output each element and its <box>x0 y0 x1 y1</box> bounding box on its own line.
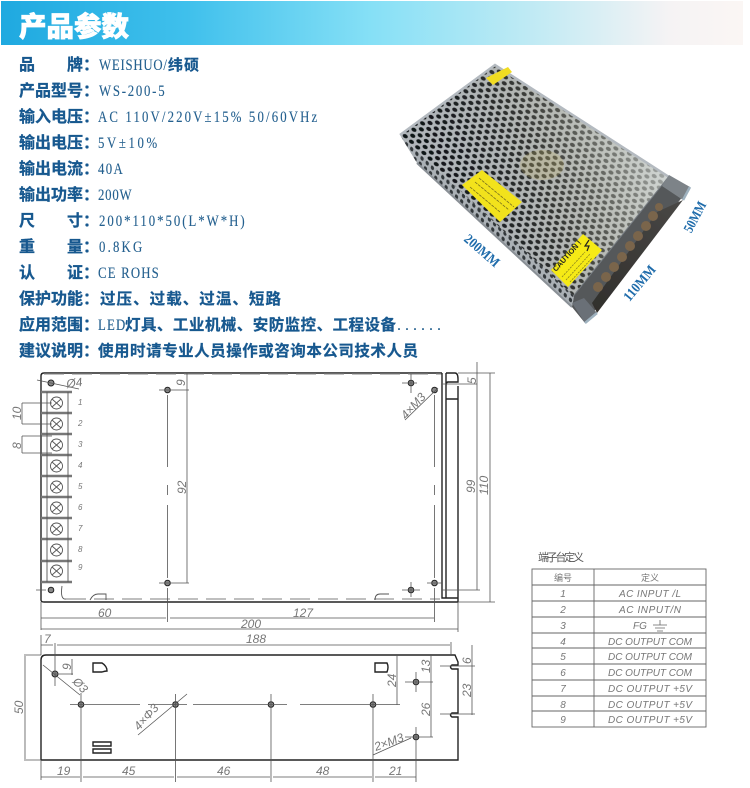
spec: brand: WEISHUO/ <box>99 57 168 74</box>
dimension values: 7 <box>44 632 52 646</box>
dimension values: 26 <box>419 702 433 717</box>
spec: weight: 量： <box>67 238 99 256</box>
spec: output voltage <box>19 133 157 152</box>
yellow caution label: CAUTION ! <box>551 239 583 273</box>
table text: DC OUTPUT +5V <box>608 684 693 695</box>
terminal screws <box>593 203 663 292</box>
dimension values: 24 <box>385 673 399 688</box>
dimension values <box>12 632 474 778</box>
table text: 2 <box>559 605 566 616</box>
table text: 编号 <box>554 572 572 583</box>
spec: input voltage: AC 110V/220V±15% 50/60VHz <box>98 109 318 126</box>
spec: application <box>19 315 441 334</box>
table text: DC OUTPUT COM <box>608 637 693 648</box>
holes <box>52 671 419 740</box>
spec: certification <box>19 264 159 282</box>
table text: 6 <box>560 668 566 679</box>
dimension values: 4×Φ3 <box>131 701 162 733</box>
spec: protection: 过压、过载、过温、短路 <box>100 289 281 308</box>
dimension values: 60 <box>98 606 112 620</box>
table text: 1 <box>560 589 566 600</box>
table text: 3 <box>560 621 566 632</box>
dimension values: 10 <box>10 406 24 420</box>
spec: application: LED <box>98 317 125 334</box>
terminal numbers: 4 <box>78 461 83 470</box>
spec: protection <box>19 289 281 308</box>
spec: input voltage <box>19 107 318 126</box>
table text: AC INPUT/N <box>618 605 682 616</box>
spec: advice: 使用时请专业人员操作或咨询本公司技术人员 <box>98 341 418 360</box>
title: 产品参数 <box>19 11 129 42</box>
spec: output current: 输出电流： <box>19 159 99 178</box>
terminal definition table <box>532 550 706 727</box>
table text: 5 <box>560 652 566 663</box>
terminal block <box>41 392 83 582</box>
top perforated face <box>400 65 669 296</box>
spec: application: 灯具、工业机械、安防监控、工程设备 <box>125 315 396 334</box>
dimension values: 21 <box>388 764 402 778</box>
front view drawing <box>12 632 475 782</box>
top view drawing <box>10 362 495 632</box>
chassis outline <box>41 373 458 602</box>
dimension: 200MM: 200MM <box>461 232 502 271</box>
spec: size: 尺 <box>19 213 35 230</box>
dimension values: 50 <box>12 700 26 714</box>
table text: DC OUTPUT +5V <box>608 715 693 726</box>
dimension values: 188 <box>246 632 266 646</box>
spec: size: 200*110*50(L*W*H) <box>99 213 245 230</box>
photo dimension labels <box>461 199 710 305</box>
centre lines and dimensions <box>24 635 475 782</box>
terminal face <box>572 177 690 323</box>
latch details <box>62 586 389 600</box>
dimension values: 2×M3 <box>371 730 406 754</box>
dimension values <box>10 375 491 631</box>
dimension values: 200 <box>240 617 261 631</box>
table text: AC INPUT /L <box>618 589 681 600</box>
spec: certification: CE ROHS <box>98 265 159 282</box>
table title: 端子台定义 <box>538 550 584 564</box>
yellow label: middle <box>462 170 522 222</box>
spec: size <box>19 211 245 230</box>
dimension values: 9 <box>174 379 188 386</box>
dimension values: 45 <box>122 764 136 778</box>
panel outline <box>41 655 458 760</box>
spec: output power: 200W <box>98 187 132 204</box>
spec: input voltage: 输入电压： <box>19 107 99 126</box>
terminal numbers <box>77 398 83 572</box>
dimension values: 5 <box>465 377 479 384</box>
dimension values: 46 <box>217 764 231 778</box>
terminal numbers: 2 <box>77 419 83 428</box>
table text: FG <box>633 621 647 632</box>
spec: weight <box>19 238 142 256</box>
slots <box>93 663 388 672</box>
spec: certification: 证： <box>67 264 99 282</box>
dimension: 110MM: 110MM <box>621 263 660 305</box>
dimension values: Ø4 <box>64 375 84 391</box>
spec: application: 应用范围： <box>19 315 99 334</box>
dimension values: 13 <box>419 659 433 673</box>
spec: output current: 40A <box>98 161 123 178</box>
icon: ground symbol <box>653 620 667 631</box>
spec: model <box>19 82 165 100</box>
table text: 定义 <box>641 572 659 583</box>
spec: output current <box>19 159 123 178</box>
table text: 9 <box>560 715 566 726</box>
centre lines and dimensions <box>22 362 495 632</box>
spec: brand: 牌： <box>67 55 99 74</box>
terminal numbers: 5 <box>78 482 83 491</box>
terminal numbers: 8 <box>78 545 83 554</box>
dimension values: Ø3 <box>69 674 91 696</box>
spec: weight: 0.8KG <box>99 239 142 256</box>
side face <box>400 135 574 307</box>
terminal numbers: 1 <box>78 398 82 407</box>
spec: advice: 建议说明： <box>19 342 99 360</box>
spec list <box>19 55 441 360</box>
dimension values: 99 <box>464 479 478 493</box>
spec: brand: 品 <box>19 57 35 74</box>
spec: output power: 输出功率： <box>19 185 99 204</box>
yellow label: top <box>486 67 512 85</box>
yellow caution label <box>551 234 602 287</box>
table text: 8 <box>560 700 566 711</box>
spec: brand: 纬硕 <box>168 56 199 74</box>
table text: 4 <box>560 637 566 648</box>
terminal numbers: 7 <box>78 524 83 533</box>
spec: protection: 保护功能： <box>19 289 99 308</box>
dimension values: 9 <box>60 663 74 670</box>
dimension values: 8 <box>10 442 24 449</box>
spec: model: WS-200-5 <box>99 83 165 100</box>
mounting holes <box>48 380 437 593</box>
spec: output power <box>19 185 132 204</box>
terminal numbers: 6 <box>78 503 83 512</box>
dimension values: 48 <box>316 764 330 778</box>
dimension values: 127 <box>293 606 314 620</box>
spec: output voltage: 输出电压： <box>19 133 99 152</box>
table grid <box>532 569 706 727</box>
dimension values: 110 <box>477 476 491 495</box>
spec: model: 产品型号： <box>19 82 99 100</box>
product photo: power supply <box>400 65 690 323</box>
dimension values: 23 <box>460 683 474 698</box>
table text: DC OUTPUT COM <box>608 652 693 663</box>
spec: brand <box>19 55 199 74</box>
table text <box>554 572 693 726</box>
dimension values: 92 <box>175 480 189 494</box>
spec: certification: 认 <box>19 264 35 282</box>
dimension values: 19 <box>57 764 71 778</box>
spec: application: ...... <box>397 317 441 334</box>
terminal numbers: 3 <box>78 440 83 449</box>
header banner <box>1 1 743 45</box>
spec: size: 寸： <box>67 211 99 230</box>
table text: 7 <box>560 684 566 695</box>
table text: DC OUTPUT +5V <box>608 700 693 711</box>
table text: DC OUTPUT COM <box>608 668 693 679</box>
spec: output voltage: 5V±10% <box>98 135 157 152</box>
spec: weight: 重 <box>19 238 35 256</box>
dimension values: 4×M3 <box>398 390 429 422</box>
dimension: 50MM: 50MM <box>682 199 710 235</box>
terminal numbers: 9 <box>78 563 83 572</box>
dimension values: 6 <box>460 657 474 664</box>
